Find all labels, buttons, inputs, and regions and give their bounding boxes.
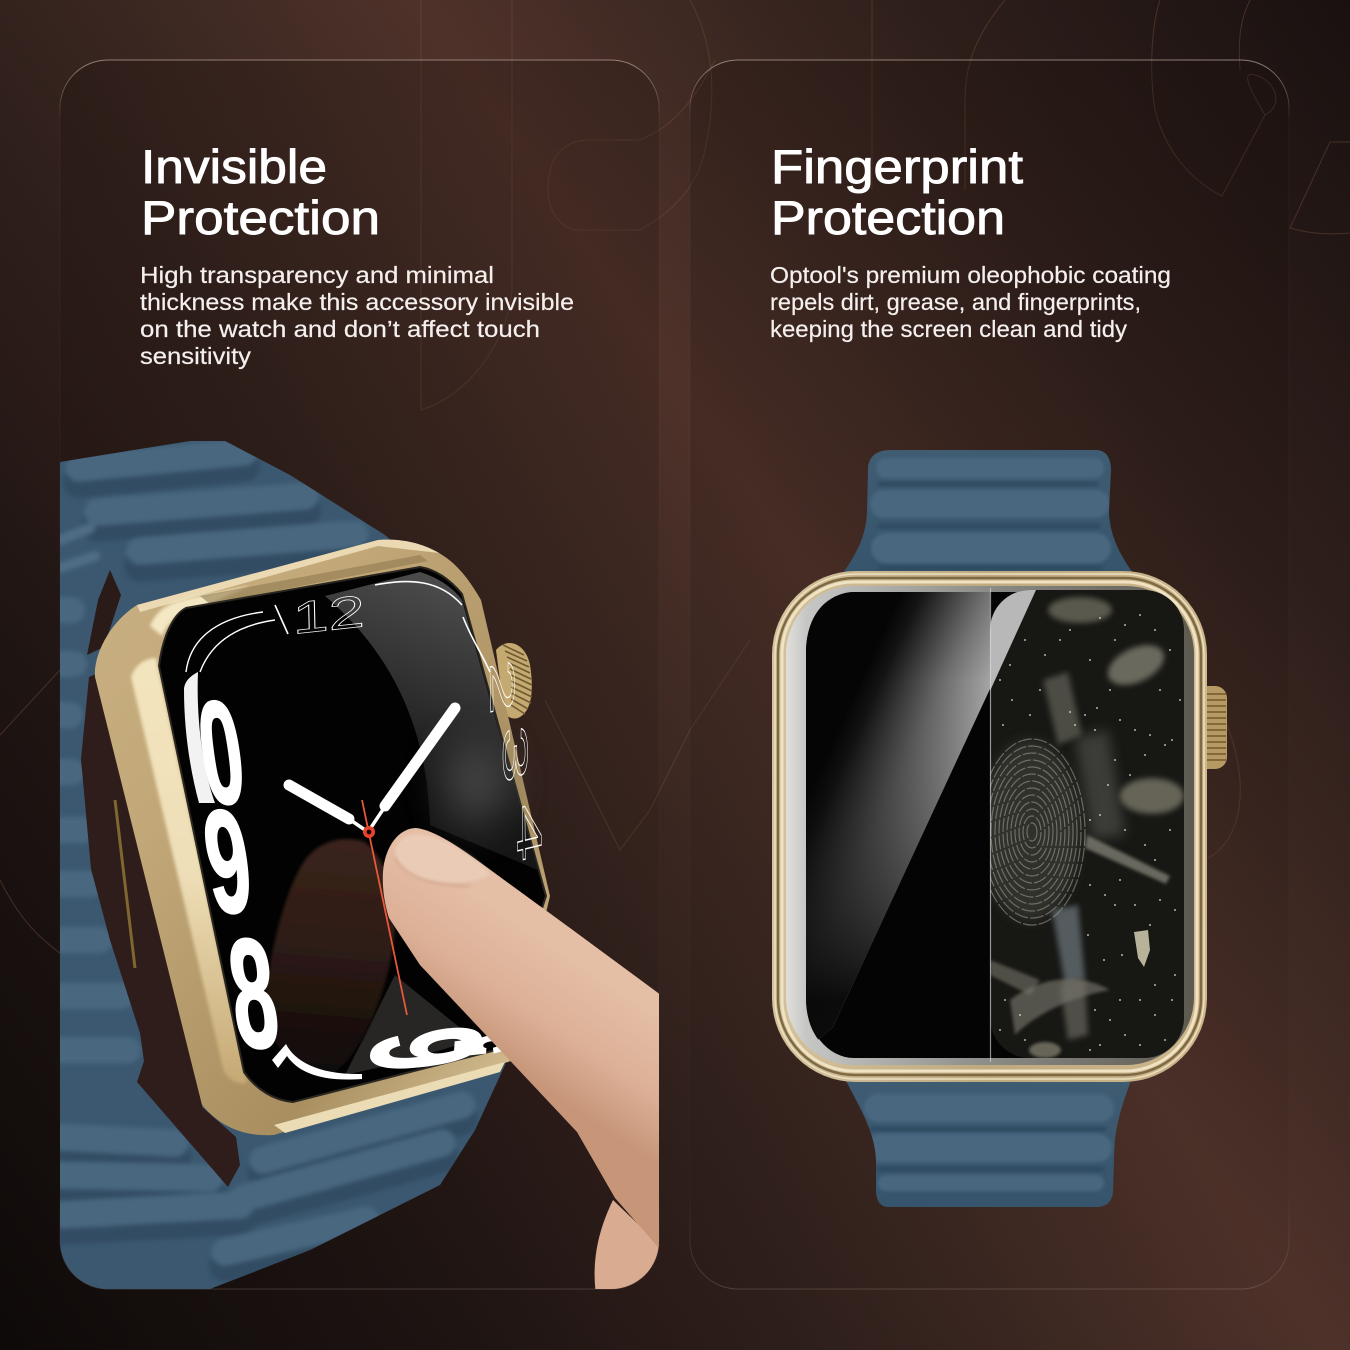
finger reflection [265, 839, 395, 1075]
panel background: right [690, 60, 1289, 1289]
heading: Fingerprint Protection: Protection [771, 191, 1005, 244]
smudges [980, 597, 1184, 1058]
watch dial numerals: 4 [509, 798, 549, 866]
watch dial numerals: 3 [495, 720, 535, 788]
watch dial numerals: 12 [292, 586, 365, 644]
text block: fingerprint protection description: repels dirt, grease, and fingerprints, [770, 289, 1141, 315]
heading: Fingerprint Protection: Fingerprint [771, 140, 1023, 193]
screen reflection [325, 572, 538, 870]
text block: fingerprint protection description [770, 262, 1171, 342]
icon: crown [496, 643, 532, 719]
dust specks [1000, 615, 1180, 1050]
watch dial numerals: 0 [189, 671, 254, 834]
icon: crown [1193, 686, 1227, 769]
clock hands [289, 708, 455, 1015]
text block: fingerprint protection description: keeping the screen clean and tidy [770, 316, 1127, 342]
watch dial numerals: 2 [482, 654, 522, 719]
text block: invisible protection description: on the watch and don’t affect touch [140, 316, 540, 342]
illustration: tilted watch with finger [50, 441, 665, 1295]
watch strap [841, 450, 1135, 1207]
watch case [772, 571, 1207, 1082]
watch glass and screen [786, 586, 1194, 1065]
dirty half [979, 590, 1184, 1058]
fingerprint [979, 739, 1085, 925]
text block: invisible protection description: sensitivity [140, 343, 251, 369]
heading: Invisible Protection [141, 140, 380, 244]
watch case [95, 540, 550, 1135]
heading: Invisible Protection: Protection [141, 191, 380, 244]
text block: invisible protection description: High transparency and minimal [140, 262, 494, 288]
heading: Fingerprint Protection [771, 140, 1023, 244]
clean half gloss [806, 592, 990, 1040]
watch dial numerals: 8 [220, 908, 287, 1081]
divider line [990, 588, 992, 1062]
watch dial numerals: 5 [438, 1030, 526, 1061]
illustration: front watch with clean and dirty halves [772, 450, 1227, 1207]
watch strap [50, 441, 520, 1289]
panel background: left [60, 60, 659, 1289]
panel: fingerprint protection [690, 60, 1289, 1289]
text block: invisible protection description [140, 262, 574, 369]
watch dial numerals [184, 582, 549, 1081]
text block: fingerprint protection description: Optool's premium oleophobic coating [770, 262, 1171, 288]
text block: invisible protection description: thickness make this accessory invisible [140, 289, 574, 315]
watch dial numerals: 6 [338, 1018, 514, 1080]
finger [383, 828, 665, 1295]
watch screen [159, 567, 546, 1102]
panel: invisible protection [50, 60, 665, 1295]
heading: Invisible Protection: Invisible [141, 140, 327, 193]
watch dial numerals: 9 [195, 779, 261, 943]
